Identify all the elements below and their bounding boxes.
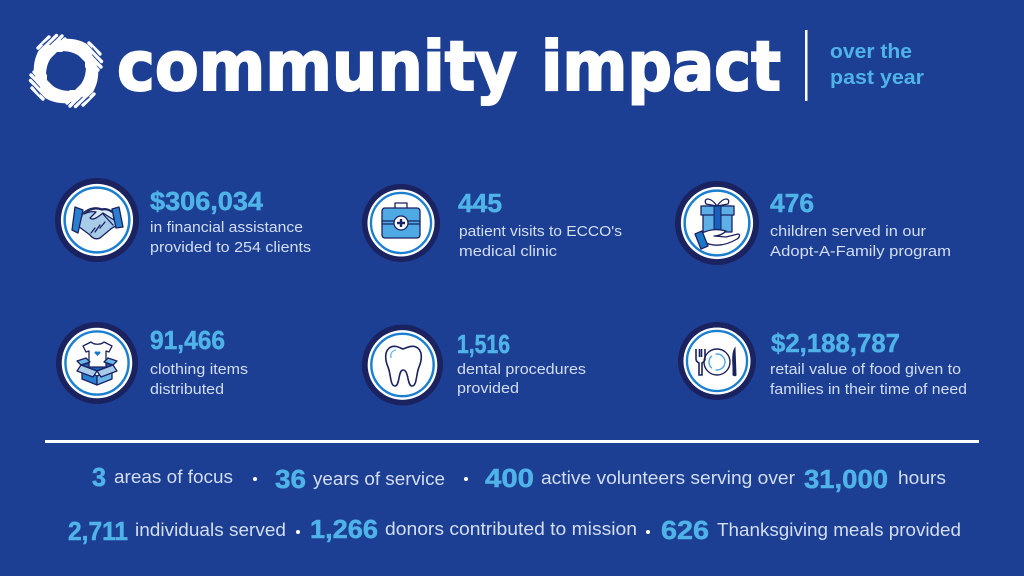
description [770,223,951,260]
value: $2,188,787 [771,328,900,358]
summary row 1: active volunteers serving over [541,467,795,488]
value: $306,034 [150,186,264,216]
summary row 2: Thanksgiving meals provided [717,519,961,540]
description [150,361,248,398]
stat: food value [678,322,967,400]
summary row 1: 36 [275,464,306,494]
description: provided to 254 clients [150,239,311,256]
description [459,223,622,260]
summary row 1: years of service [313,468,445,489]
summary row 1: 400 [485,463,534,493]
summary row 2 [68,514,961,546]
description: provided [457,380,519,397]
value: 1,516 [457,329,510,359]
icon: medical kit [362,184,440,262]
summary row 2: donors contributed to mission [385,518,637,539]
title: impact [541,27,781,107]
description: clothing items [150,361,248,378]
description: in financial assistance [150,219,303,236]
description: distributed [150,381,224,398]
subtitle [830,41,924,89]
icon: handshake [55,178,139,262]
subtitle: over the [830,41,912,63]
stat: children served [675,181,951,265]
description: families in their time of need [770,381,967,398]
description [770,361,967,398]
description: retail value of food given to [770,361,961,378]
description [457,361,586,397]
title: community [117,27,517,107]
icon: tooth [362,324,443,406]
subtitle: past year [830,67,924,89]
title [117,27,781,107]
summary row 1: areas of focus [114,466,233,487]
summary row 2: 1,266 [310,514,378,544]
title divider [805,30,808,101]
stat: dental procedures [362,324,586,406]
description: dental procedures [457,361,586,378]
summary row 1: hours [898,467,946,488]
value: 476 [770,188,814,218]
description [150,219,311,256]
icon: gift on hand [675,181,759,265]
summary row 2: 2,711 [68,516,128,546]
icon: plate and cutlery [678,322,756,400]
description: patient visits to ECCO's [459,223,622,240]
stat: clothing items [56,322,248,404]
summary row 1: 31,000 [804,464,888,494]
value: 91,466 [150,325,225,355]
summary row 2: 626 [661,515,709,545]
logo: four hands ring [30,36,102,107]
section divider [45,440,979,443]
icon: clothing box [56,322,138,404]
summary row 1 [92,462,946,494]
stat: patient visits [362,184,622,262]
value: 445 [458,188,502,218]
description: medical clinic [459,243,558,260]
description: children served in our [770,223,926,240]
description: Adopt-A-Family program [770,243,951,260]
summary row 1: 3 [92,462,106,492]
stat: financial assistance [55,178,311,262]
summary row 2: individuals served [135,519,286,540]
